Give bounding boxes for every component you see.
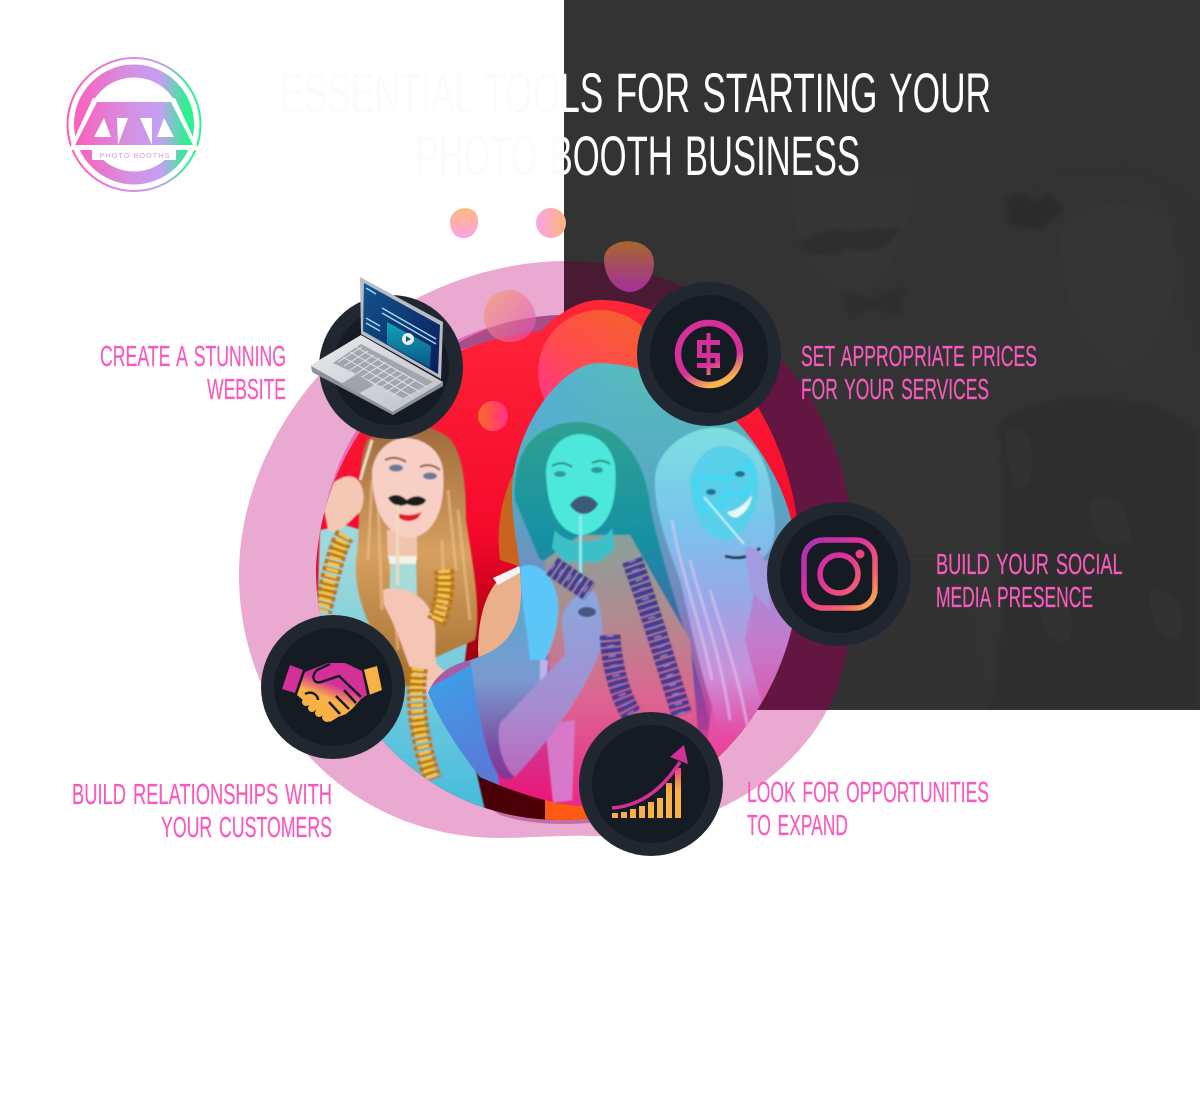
bubbles [450,208,654,431]
label: set appropriate prices: SET APPROPRIATE PRICES [801,341,1037,373]
icon: growth chart (look for opportunities) [579,712,723,856]
label: build your social media presence: MEDIA PRESENCE [936,582,1093,614]
panel: dark header photo background [564,0,1200,710]
logo: ATA Photo Booths [68,58,200,191]
inner blob crescent [320,315,640,824]
label: build relationships with your customers: BUILD RELATIONSHIPS WITH [72,779,332,811]
background orange glow circle [538,310,642,400]
label: create a stunning website: CREATE A STUNNING [100,341,286,373]
icon: laptop (create a stunning website) [311,277,463,439]
gold garland [322,535,445,780]
woman right [654,427,792,758]
woman left [316,425,485,810]
label: look for opportunities to expand: TO EXPAND [747,810,848,842]
icon: handshake (build relationships) [261,615,405,759]
background blob (over dark panel) [564,261,849,710]
title: PHOTO BOOTH BUSINESS [415,124,860,187]
photo: three women with props [316,300,797,820]
background blob (light area) [239,261,853,838]
icon: instagram (social media) [767,502,911,646]
icon: dollar coin (set appropriate prices) [637,282,781,426]
centre woman [470,422,712,810]
logo: ATA Photo Booths: PHOTO BOOTHS [100,151,170,160]
orange skirt [545,800,588,820]
label: create a stunning website: WEBSITE [207,374,286,406]
label: look for opportunities to expand: LOOK FOR OPPORTUNITIES [747,777,989,809]
label: set appropriate prices: FOR YOUR SERVICES [801,374,989,406]
blue drape lower left [428,664,500,786]
overlay: gradient shape with women in tinted colours [420,360,810,810]
label: build relationships with your customers: YOUR CUSTOMERS [161,812,332,844]
natural hair and shoulder of centre woman [478,472,522,657]
